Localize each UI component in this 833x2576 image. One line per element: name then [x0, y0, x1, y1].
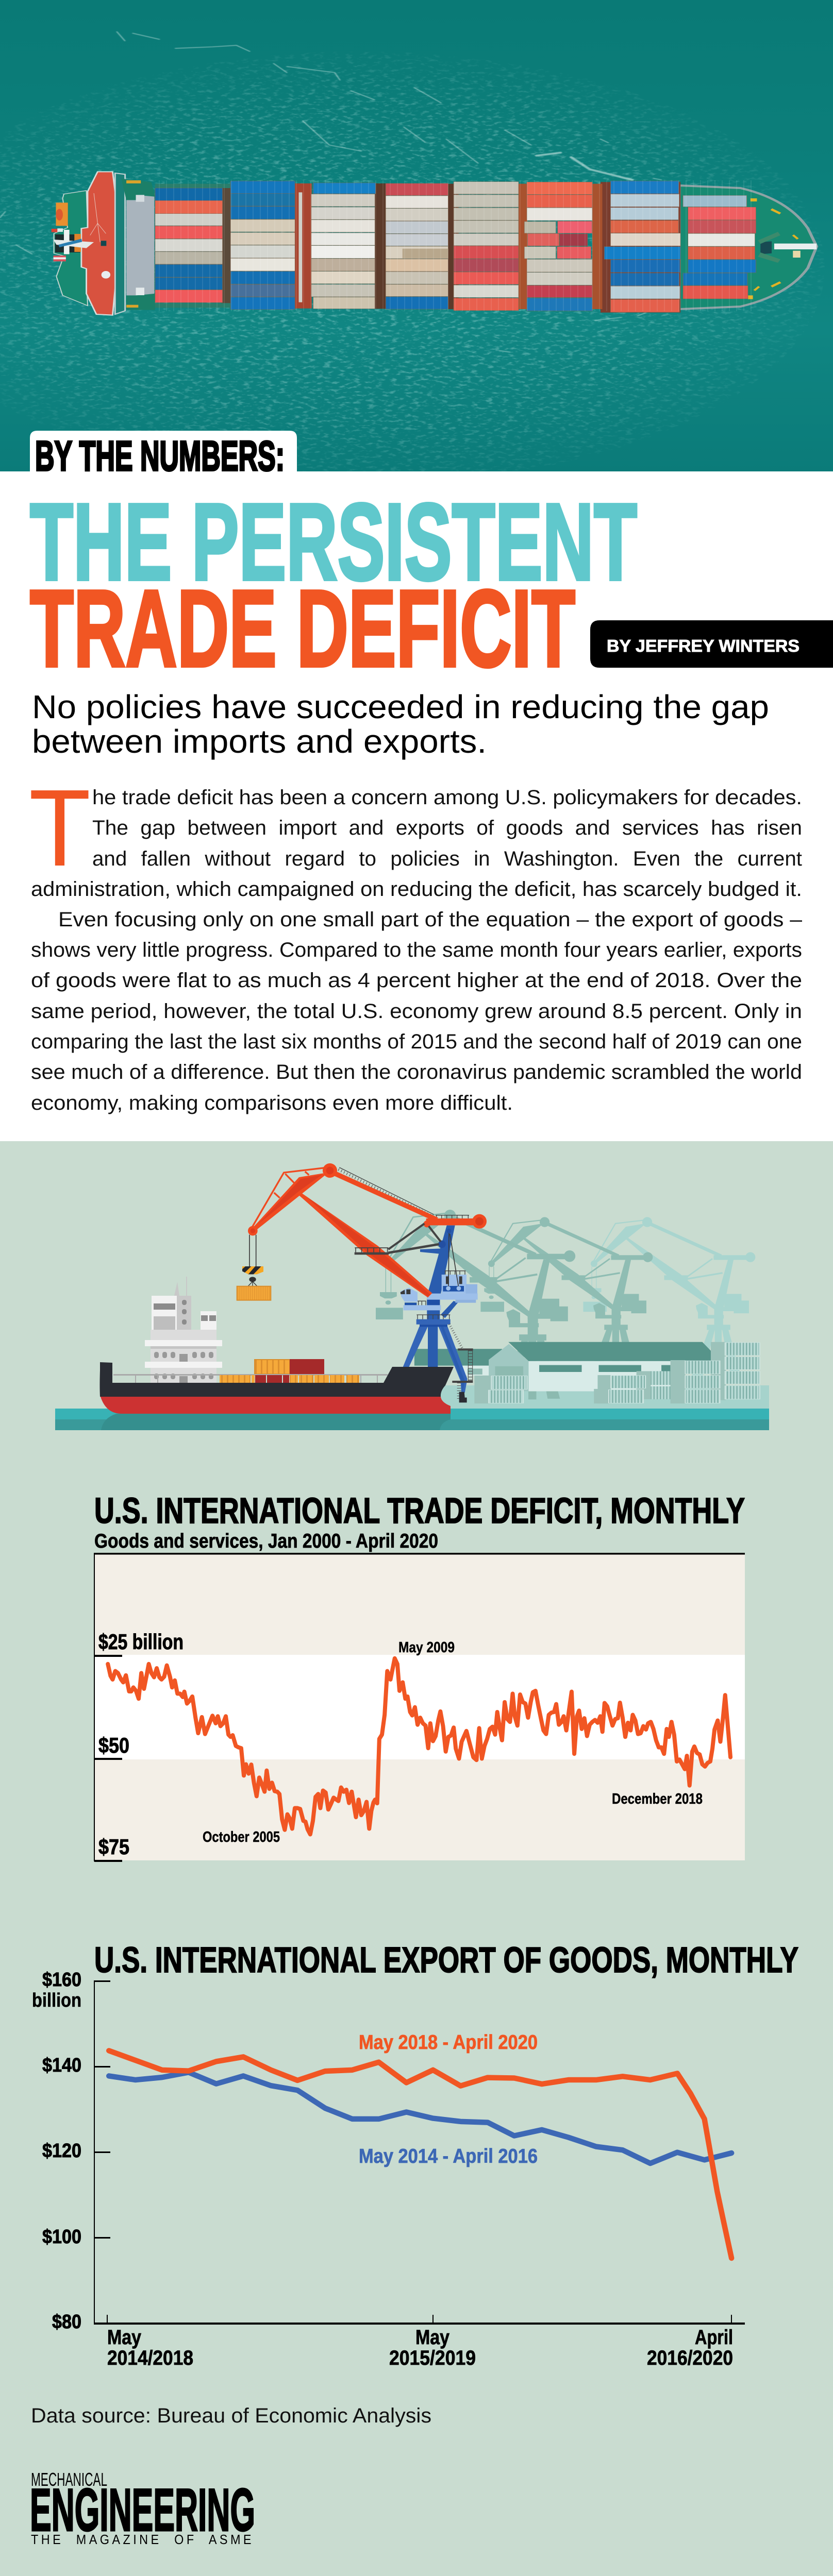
- series label: blue: May 2014 - April 2016: [359, 2145, 538, 2167]
- background crane far right: [583, 1217, 755, 1381]
- x axis labels: May: [107, 2326, 142, 2349]
- paragraph 2: of goods were flat to as much as 4 percent higher at the end of 2018. Over the: [31, 969, 802, 992]
- illustration: port with cranes and cargo ship: [55, 1163, 769, 1430]
- paragraph 1: administration, which campaigned on reducing the deficit, has scarcely budged it.: [31, 878, 802, 901]
- x axis labels: 2016/2020: [647, 2347, 733, 2369]
- container stack 4: [386, 183, 448, 309]
- page background: white upper section: [0, 471, 833, 1141]
- subheading: between imports and exports.: [32, 723, 487, 760]
- paragraph 2: Even focusing only on one small part of the equation – the export of goods –: [58, 908, 803, 931]
- bow deck: [601, 182, 817, 313]
- annotation: May 2009: May 2009: [398, 1639, 455, 1656]
- y axis labels: $100: [42, 2226, 81, 2248]
- paragraph 2: same period, however, the total U.S. economy grew around 8.5 percent. Only in: [31, 1000, 802, 1023]
- body text: [29, 767, 803, 1114]
- y axis labels: $140: [42, 2055, 81, 2076]
- main crane: [237, 1163, 487, 1402]
- cargo ship: [100, 1277, 454, 1414]
- y axis labels: $50: [98, 1733, 129, 1757]
- ship wake foam: [0, 32, 661, 352]
- container stack 1: [155, 188, 223, 302]
- deck containers: [113, 1359, 388, 1383]
- ship superstructure: [145, 1277, 222, 1383]
- warehouse and stacked containers: [414, 1342, 760, 1403]
- hook and suspended container: [237, 1235, 271, 1300]
- panel: green charts section background: [0, 1141, 833, 2576]
- x axis labels: [107, 2326, 733, 2369]
- y axis labels: $75: [98, 1835, 129, 1859]
- logo: Mechanical Engineering: [30, 2469, 255, 2547]
- x axis labels: 2014/2018: [107, 2347, 193, 2369]
- data source note: Data source: Bureau of Economic Analysis: [31, 2404, 431, 2427]
- plot bands: [94, 1553, 745, 1862]
- photo: container ship on the ocean: [0, 0, 833, 471]
- subheading: No policies have succeeded in reducing the gap: [32, 688, 769, 725]
- crane ladders and foot: [449, 1324, 473, 1402]
- paragraph 2: see much of a difference. But then the coronavirus pandemic scrambled the world: [31, 1061, 802, 1083]
- paragraph 1: The gap between import and exports of goods and services has risen: [92, 817, 802, 839]
- ship stern and bridge deck: [52, 172, 155, 315]
- crane cabins: [401, 1233, 478, 1310]
- container ship: [52, 172, 817, 315]
- series label: orange: May 2018 - April 2020: [359, 2031, 538, 2054]
- background crane near: [376, 1210, 575, 1399]
- logo: Mechanical Engineering: ENGINEERING: [30, 2476, 255, 2544]
- container stack 7: [604, 181, 680, 312]
- paragraph 1: and fallen without regard to policies in Washington. Even the current: [92, 848, 802, 870]
- y axis labels: [32, 1969, 81, 2333]
- logo: Mechanical Engineering: THE MAGAZINE OF ASME: [31, 2532, 254, 2547]
- y axis labels: $80: [52, 2311, 81, 2333]
- crane tower: [403, 1225, 468, 1393]
- water: [55, 1409, 769, 1430]
- deficit line: [108, 1658, 730, 1835]
- container stack 3: [311, 183, 376, 309]
- container stack 8: [683, 195, 756, 299]
- crane boom: [248, 1163, 487, 1297]
- paragraph 2: economy, making comparisons even more difficult.: [31, 1092, 513, 1114]
- y axis labels: $25 billion: [98, 1630, 184, 1654]
- y axis labels: $120: [42, 2140, 81, 2162]
- x axis labels: May: [415, 2326, 450, 2349]
- x axis labels: April: [695, 2326, 733, 2349]
- annotation: October 2005: October 2005: [203, 1829, 280, 1845]
- background crane middle: [480, 1217, 653, 1381]
- paragraph 2: [31, 908, 803, 1114]
- blue line: May 2014 - April 2016: [109, 2072, 731, 2163]
- deck between stern and bow: [155, 183, 459, 309]
- orange line: May 2018 - April 2020: [109, 2050, 731, 2258]
- paragraph 1: [31, 786, 802, 901]
- paragraph 1: he trade deficit has been a concern among U.S. policymakers for decades.: [92, 786, 802, 809]
- tab: by the numbers: [30, 431, 297, 480]
- byline: [590, 620, 833, 668]
- paragraph 2: shows very little progress. Compared to the same month four years earlier, exports: [31, 939, 802, 961]
- subheading: [32, 688, 769, 760]
- drop cap: T: [29, 767, 91, 889]
- y axis labels: billion: [32, 1990, 81, 2011]
- tab: by the numbers: BY THE NUMBERS:: [35, 433, 285, 480]
- container stack 5: [454, 182, 602, 311]
- logo: Mechanical Engineering: MECHANICAL: [31, 2469, 107, 2490]
- paragraph 2: comparing the last the last six months of 2015 and the second half of 2019 can one: [31, 1030, 802, 1053]
- byline: BY JEFFREY WINTERS: [607, 636, 799, 655]
- ship hull: [100, 1362, 454, 1414]
- y axis labels: [98, 1630, 184, 1859]
- ocean background: [0, 0, 833, 471]
- y axis labels: $160: [42, 1969, 81, 1991]
- container stack 2: [230, 181, 295, 310]
- axes and ticks: [94, 1980, 745, 2325]
- chart: U.S. international trade deficit, monthly: [94, 1490, 745, 1862]
- container stack 6: [524, 182, 592, 311]
- chart: U.S. international export of goods, monthly: [32, 1940, 798, 2369]
- quay: [441, 1385, 769, 1409]
- annotation: December 2018: December 2018: [612, 1791, 703, 1807]
- x axis labels: 2015/2019: [389, 2347, 476, 2369]
- chart subheading: Goods and services, Jan 2000 - April 2020: [94, 1530, 438, 1552]
- ocean wave chop: [0, 52, 833, 471]
